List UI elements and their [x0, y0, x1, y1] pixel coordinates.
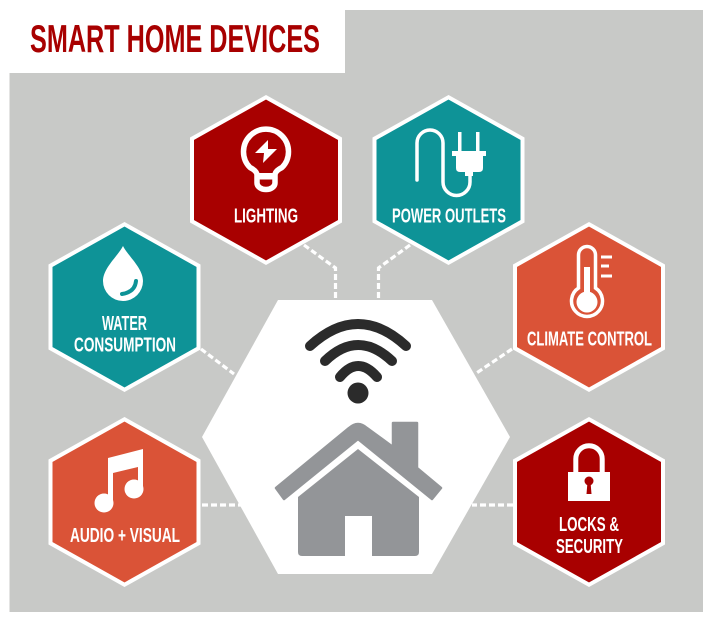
hexagon: water consumption	[50, 224, 198, 390]
icon: music notes	[94, 449, 144, 512]
label: LOCKS &	[559, 514, 619, 536]
hexagon: power outlets	[374, 97, 522, 263]
connectors: dashed lines	[201, 245, 513, 505]
hexagon: locks and security	[515, 419, 663, 585]
hexagon: climate control	[515, 224, 663, 390]
title: SMART HOME DEVICES	[30, 18, 320, 61]
icon: water drop	[103, 246, 143, 301]
hexagon: audio + visual	[50, 419, 198, 585]
label: LIGHTING	[234, 206, 298, 228]
icon: padlock	[568, 446, 610, 501]
icon: plug	[417, 130, 486, 196]
icon: house	[276, 423, 441, 556]
label line 2: CONSUMPTION	[74, 334, 176, 356]
central hexagon	[202, 300, 510, 574]
title box	[0, 0, 345, 73]
icon: thermometer	[571, 246, 612, 316]
label: WATER	[102, 313, 147, 335]
label line 2: SECURITY	[556, 536, 623, 558]
icon: wifi	[310, 324, 406, 404]
label: AUDIO + VISUAL	[70, 525, 180, 547]
hexagon: lighting	[192, 97, 340, 263]
label: POWER OUTLETS	[392, 206, 506, 228]
icon: light bulb	[243, 129, 289, 190]
